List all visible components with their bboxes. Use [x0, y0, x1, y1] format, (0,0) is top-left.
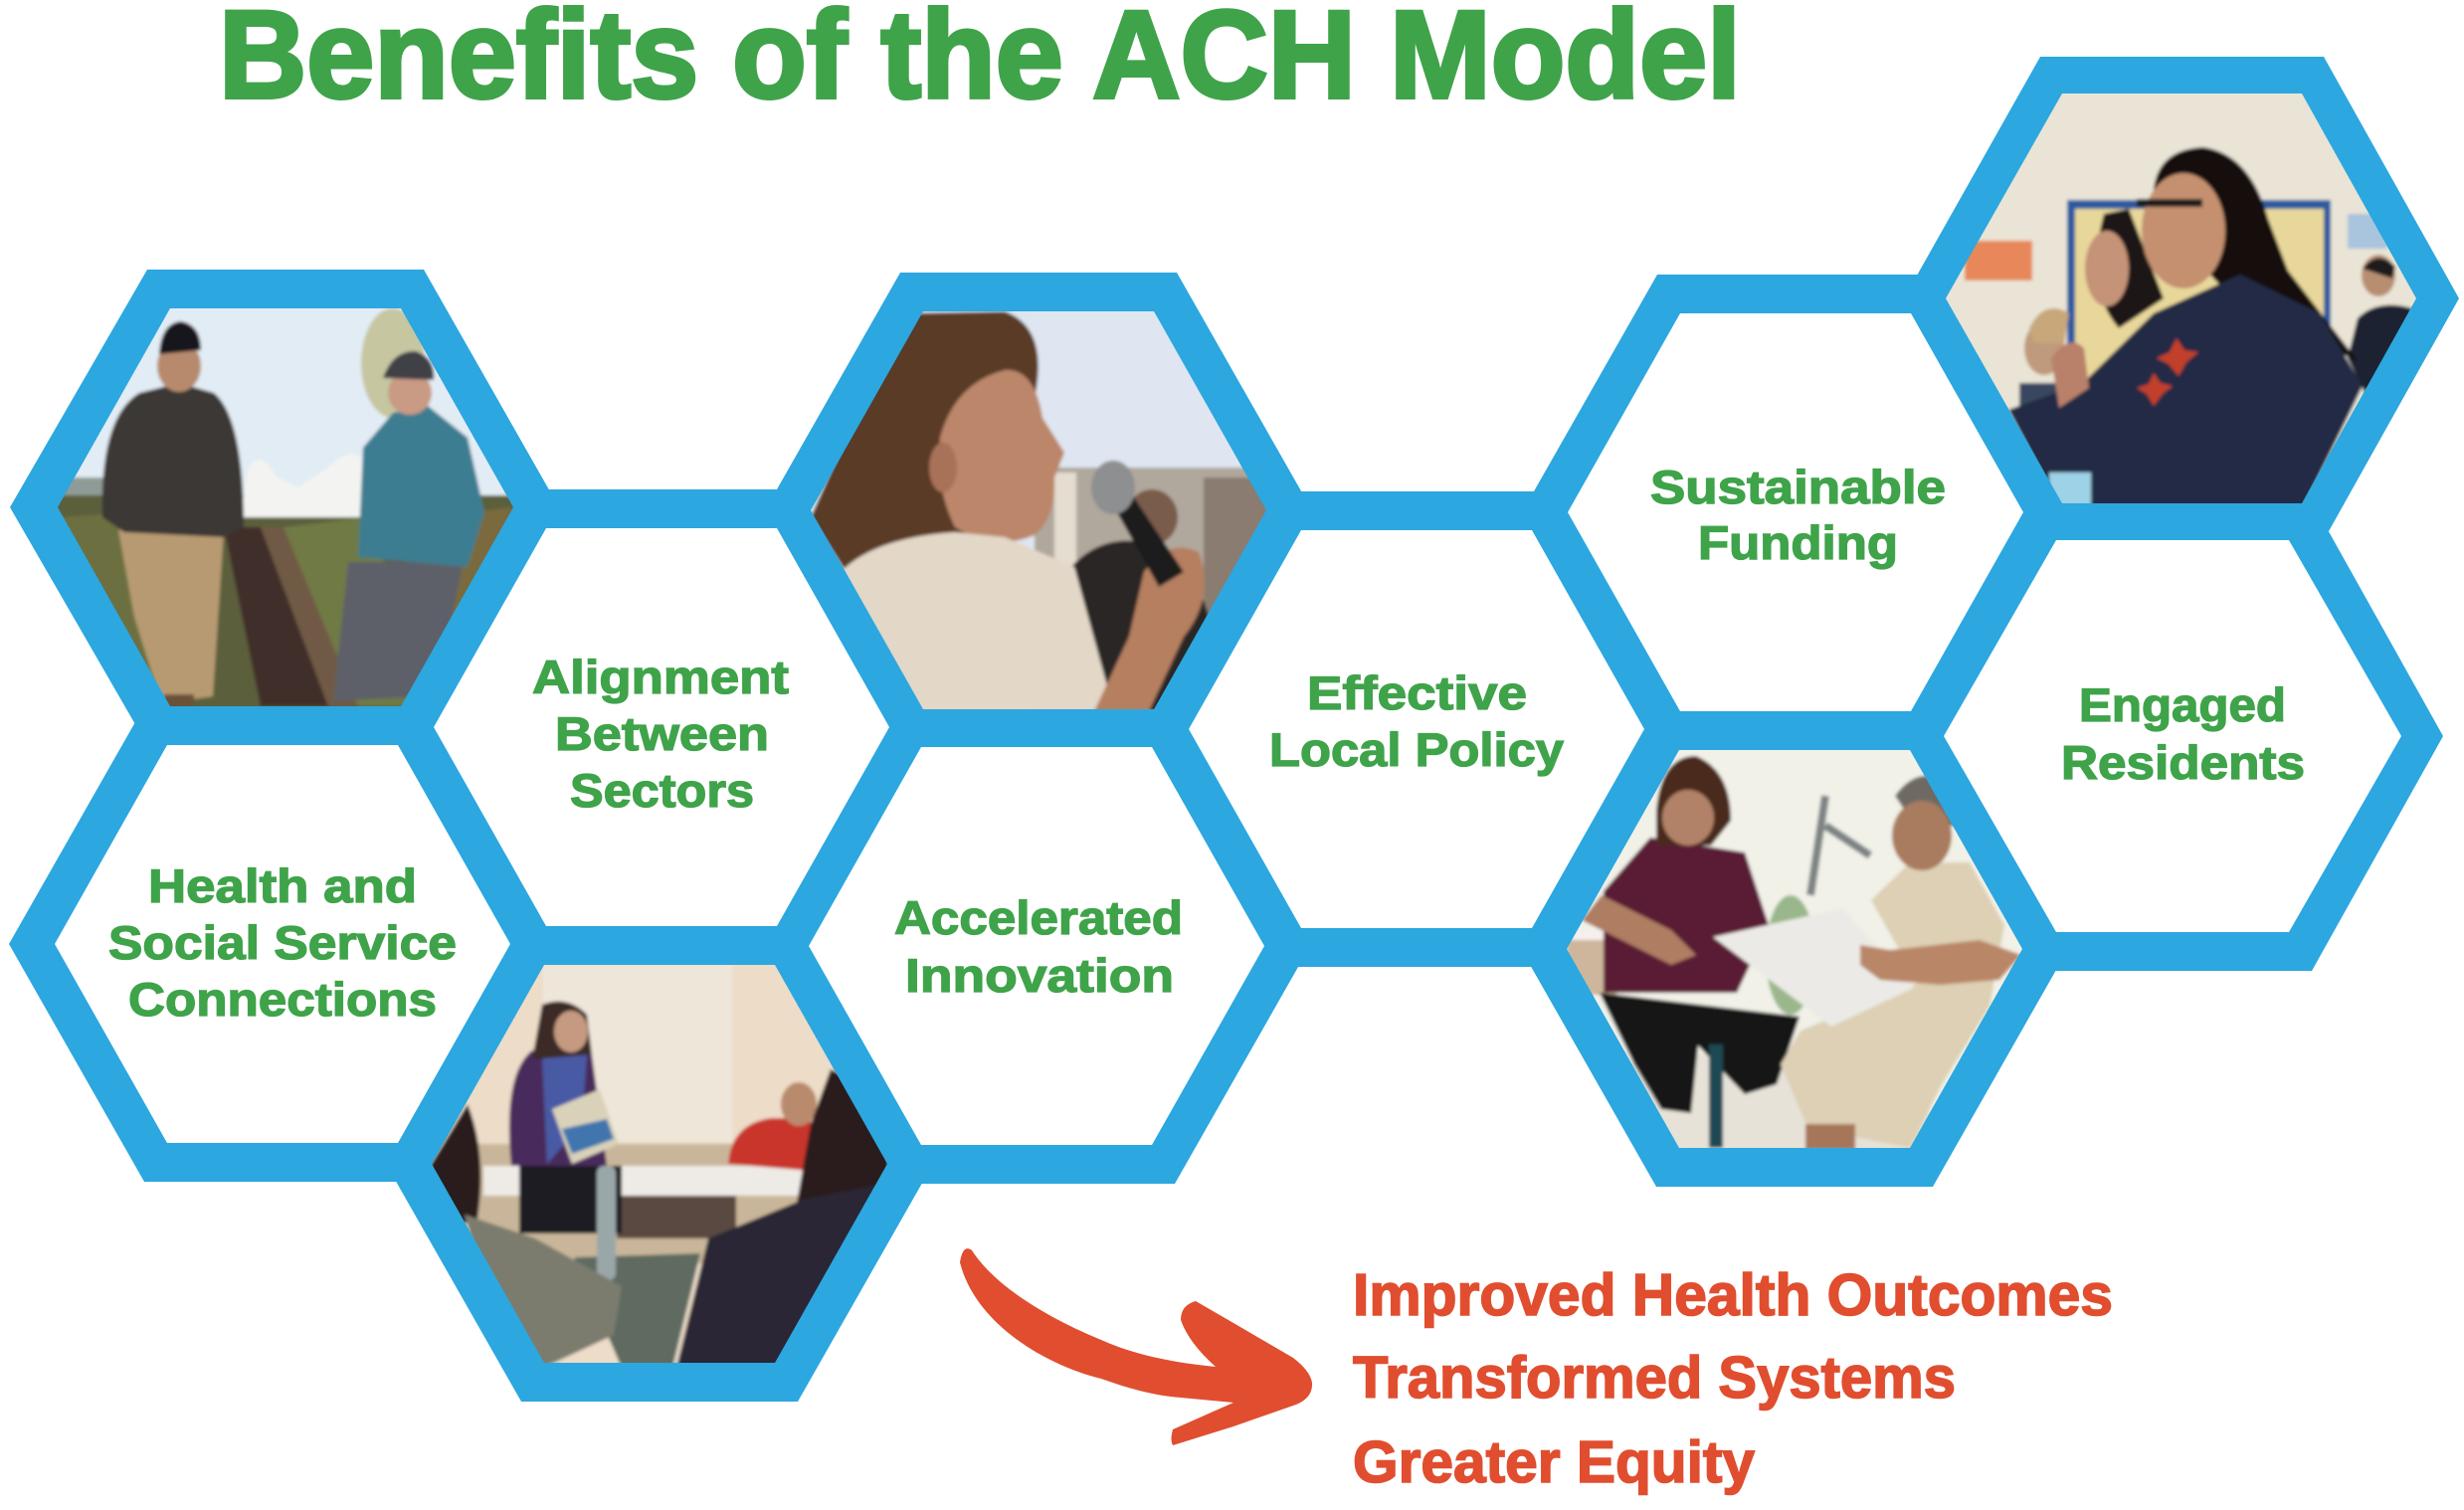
text hexagon: Accelerated Innovation: Innovation	[905, 949, 1174, 1002]
outcomes text: Transformed Systems	[1353, 1345, 1956, 1411]
text hexagon: Accelerated Innovation: Accelerated	[894, 891, 1183, 944]
text hexagon: Alignment Between Sectors	[434, 528, 889, 926]
text hexagon: Sustainable Funding: Funding	[1698, 516, 1898, 569]
photo hexagon: two women reading a folder	[1562, 746, 2029, 1154]
text hexagon: Sustainable Funding	[1568, 313, 2023, 711]
text hexagon: Health and Social Service Connections	[55, 745, 510, 1143]
text hexagon: Alignment Between Sectors: Sectors	[570, 764, 754, 817]
text hexagon: Effective Local Policy	[1189, 530, 1644, 928]
text hexagon: Effective Local Policy: Local Policy	[1269, 723, 1564, 776]
text hexagon: Engaged Residents: Residents	[2061, 736, 2305, 789]
text hexagon: Alignment Between Sectors: Between	[555, 707, 769, 760]
text hexagon: Effective Local Policy: Effective	[1307, 666, 1527, 719]
arrow	[960, 1248, 1312, 1445]
outcomes text: Greater Equity	[1353, 1429, 1755, 1495]
text hexagon: Engaged Residents	[1944, 540, 2401, 932]
text hexagon: Accelerated Innovation	[809, 747, 1264, 1145]
photo hexagon: two farmers in a field	[50, 303, 527, 709]
outcomes text: Improved Health Outcomes	[1353, 1262, 2113, 1328]
text hexagon: Sustainable Funding: Sustainable	[1650, 461, 1946, 513]
text hexagon: Health and Social Service Connections: Connections	[128, 973, 437, 1026]
photo hexagon: smiling women in navy jacket	[1940, 90, 2427, 507]
text hexagon: Health and Social Service Connections: Health and	[148, 859, 417, 912]
text hexagon: Engaged Residents: Engaged	[2079, 678, 2286, 731]
photo hexagon: woman speaking into microphone	[806, 303, 1273, 716]
outcomes text	[1353, 1262, 2113, 1495]
photo hexagon: meeting around a table	[428, 960, 895, 1368]
text hexagon: Health and Social Service Connections: Social Service	[108, 916, 457, 969]
text hexagon: Alignment Between Sectors: Alignment	[532, 651, 789, 703]
